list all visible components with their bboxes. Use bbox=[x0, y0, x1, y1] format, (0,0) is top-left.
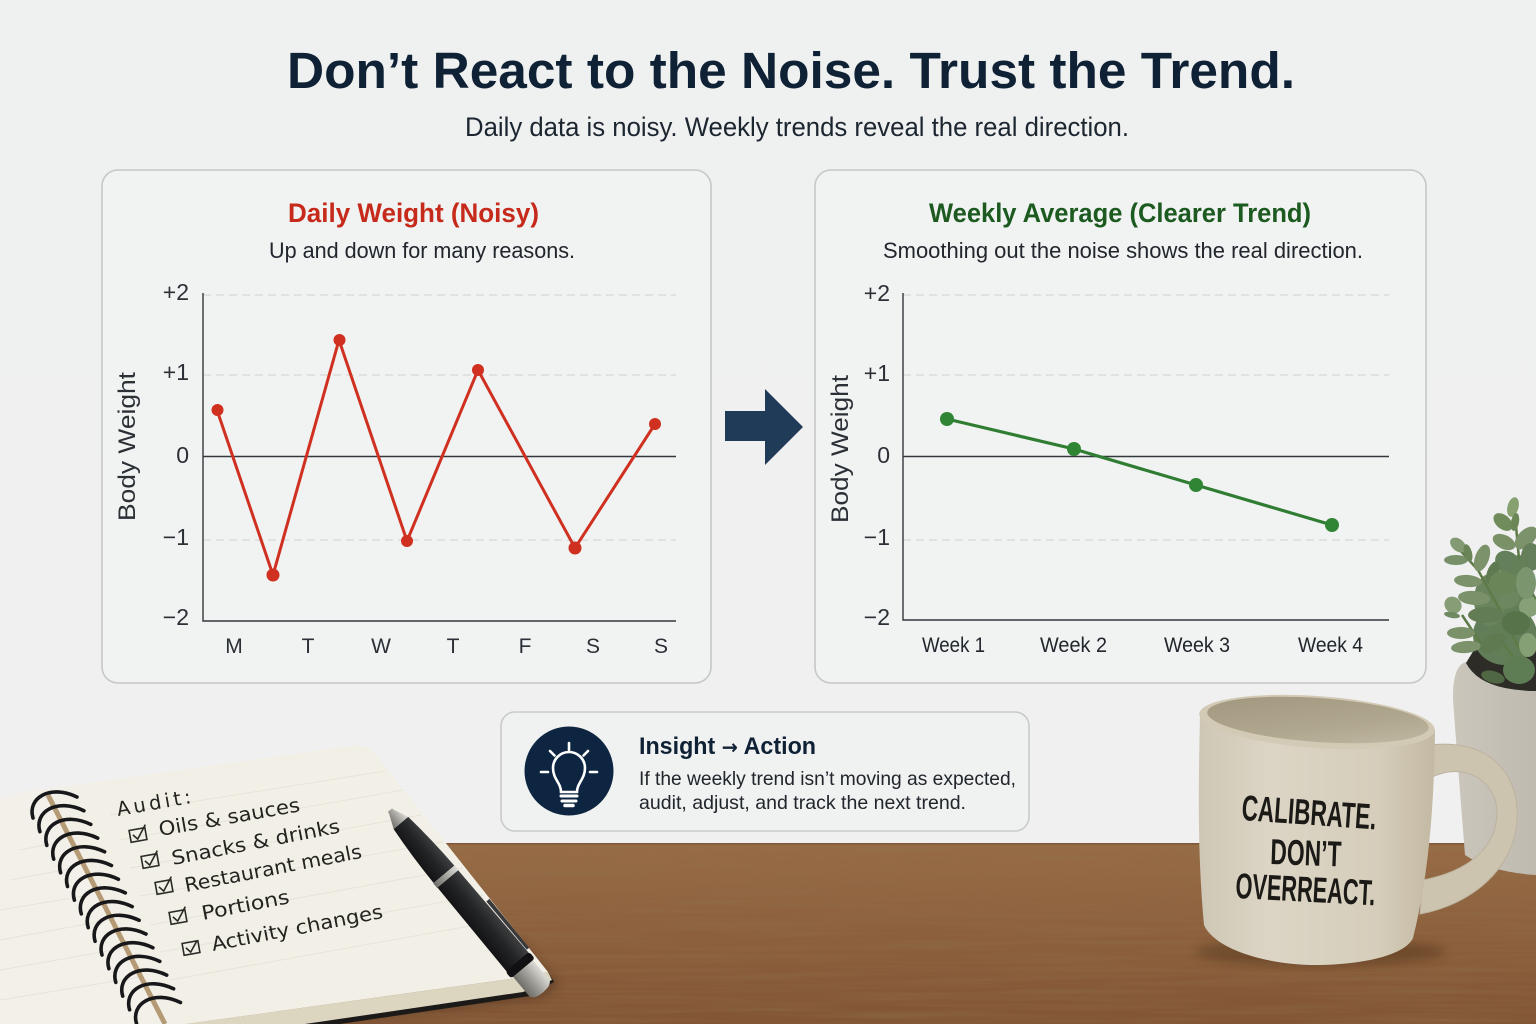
weekly line chart bbox=[940, 412, 1339, 532]
cover edge bbox=[300, 972, 554, 1024]
handwritten list: Snacks & drinks bbox=[170, 815, 342, 870]
x axis day labels: T bbox=[302, 635, 315, 658]
plant in pot bbox=[1441, 496, 1536, 875]
mug slogan: DON’T bbox=[1270, 831, 1342, 874]
handwritten list: Restaurant meals bbox=[183, 840, 364, 897]
handwritten list bbox=[115, 785, 385, 956]
heading: daily weight: Daily Weight (Noisy) bbox=[288, 198, 539, 228]
panel: weekly average bbox=[815, 170, 1426, 683]
x axis day labels: S bbox=[586, 635, 600, 658]
y axis title: Body Weight bbox=[114, 372, 141, 521]
panel subtitle: Up and down for many reasons. bbox=[269, 238, 575, 263]
callout body: If the weekly trend isn’t moving as expected, bbox=[639, 768, 1016, 790]
mug slogan: CALIBRATE. bbox=[1240, 787, 1378, 837]
right page bbox=[40, 745, 548, 1024]
notebook with audit checklist bbox=[0, 745, 560, 1024]
page block edge bbox=[172, 972, 552, 1024]
mug interior bbox=[1206, 690, 1430, 750]
y axis labels: +1 bbox=[163, 359, 189, 385]
title: Don’t React to the Noise. Trust the Trend. bbox=[287, 42, 1295, 99]
mug rim bbox=[1197, 688, 1437, 756]
leaves bbox=[1441, 496, 1536, 686]
mug slogan bbox=[1235, 787, 1378, 913]
x axis week labels: Week 2 bbox=[1040, 634, 1107, 657]
panel subtitle: Smoothing out the noise shows the real direction. bbox=[883, 238, 1363, 263]
x axis week labels: Week 1 bbox=[922, 634, 985, 657]
y axis labels: −1 bbox=[864, 524, 890, 550]
y axis labels: +2 bbox=[864, 280, 890, 306]
callout: insight to action bbox=[501, 712, 1029, 831]
wooden desk bbox=[0, 843, 1536, 1024]
subtitle: Daily data is noisy. Weekly trends reveal the real direction. bbox=[465, 112, 1129, 142]
page rules bbox=[0, 771, 503, 1000]
pot bbox=[1453, 662, 1536, 875]
spine band bbox=[48, 795, 165, 1024]
x axis day labels: M bbox=[225, 635, 243, 658]
checkboxes bbox=[129, 825, 200, 955]
x axis week labels: Week 4 bbox=[1298, 634, 1363, 657]
y axis labels: 0 bbox=[877, 442, 890, 468]
left page bbox=[0, 788, 180, 1024]
daily line chart bbox=[212, 334, 661, 582]
mug handle bbox=[1420, 744, 1517, 914]
pot soil bbox=[1466, 640, 1536, 691]
x axis day labels bbox=[225, 635, 668, 658]
x axis day labels: W bbox=[371, 635, 391, 658]
x axis day labels: F bbox=[519, 635, 531, 658]
arrow bbox=[725, 389, 803, 465]
y axis labels bbox=[163, 279, 189, 630]
y axis labels: +1 bbox=[864, 360, 890, 386]
pen bbox=[378, 798, 558, 1002]
handwritten list: Audit: bbox=[115, 785, 193, 821]
y axis labels: +2 bbox=[163, 279, 189, 305]
x axis day labels: S bbox=[654, 635, 668, 658]
heading: weekly average: Weekly Average (Clearer Trend) bbox=[929, 198, 1311, 228]
handwritten list: Oils & sauces bbox=[157, 793, 302, 841]
panel: daily weight bbox=[102, 170, 711, 683]
y axis title: Body Weight bbox=[827, 375, 854, 523]
callout body: audit, adjust, and track the next trend. bbox=[639, 792, 966, 814]
y axis labels: −2 bbox=[163, 604, 189, 630]
spiral binding bbox=[32, 792, 181, 1024]
y axis labels: 0 bbox=[176, 442, 189, 468]
x axis week labels: Week 3 bbox=[1164, 634, 1230, 657]
y axis labels bbox=[864, 280, 890, 630]
x axis week labels bbox=[922, 634, 1363, 657]
y axis labels: −2 bbox=[864, 604, 890, 630]
handwritten list: Activity changes bbox=[210, 900, 385, 956]
icon: light bulb bbox=[524, 726, 614, 816]
mug slogan: OVERREACT. bbox=[1235, 865, 1377, 913]
handwritten list: Portions bbox=[200, 885, 291, 925]
coffee mug bbox=[1195, 688, 1517, 966]
callout body bbox=[639, 768, 1016, 814]
x axis day labels: T bbox=[447, 635, 460, 658]
callout heading: Insight → Action bbox=[639, 733, 816, 760]
y axis labels: −1 bbox=[163, 524, 189, 550]
mug body bbox=[1199, 716, 1435, 965]
